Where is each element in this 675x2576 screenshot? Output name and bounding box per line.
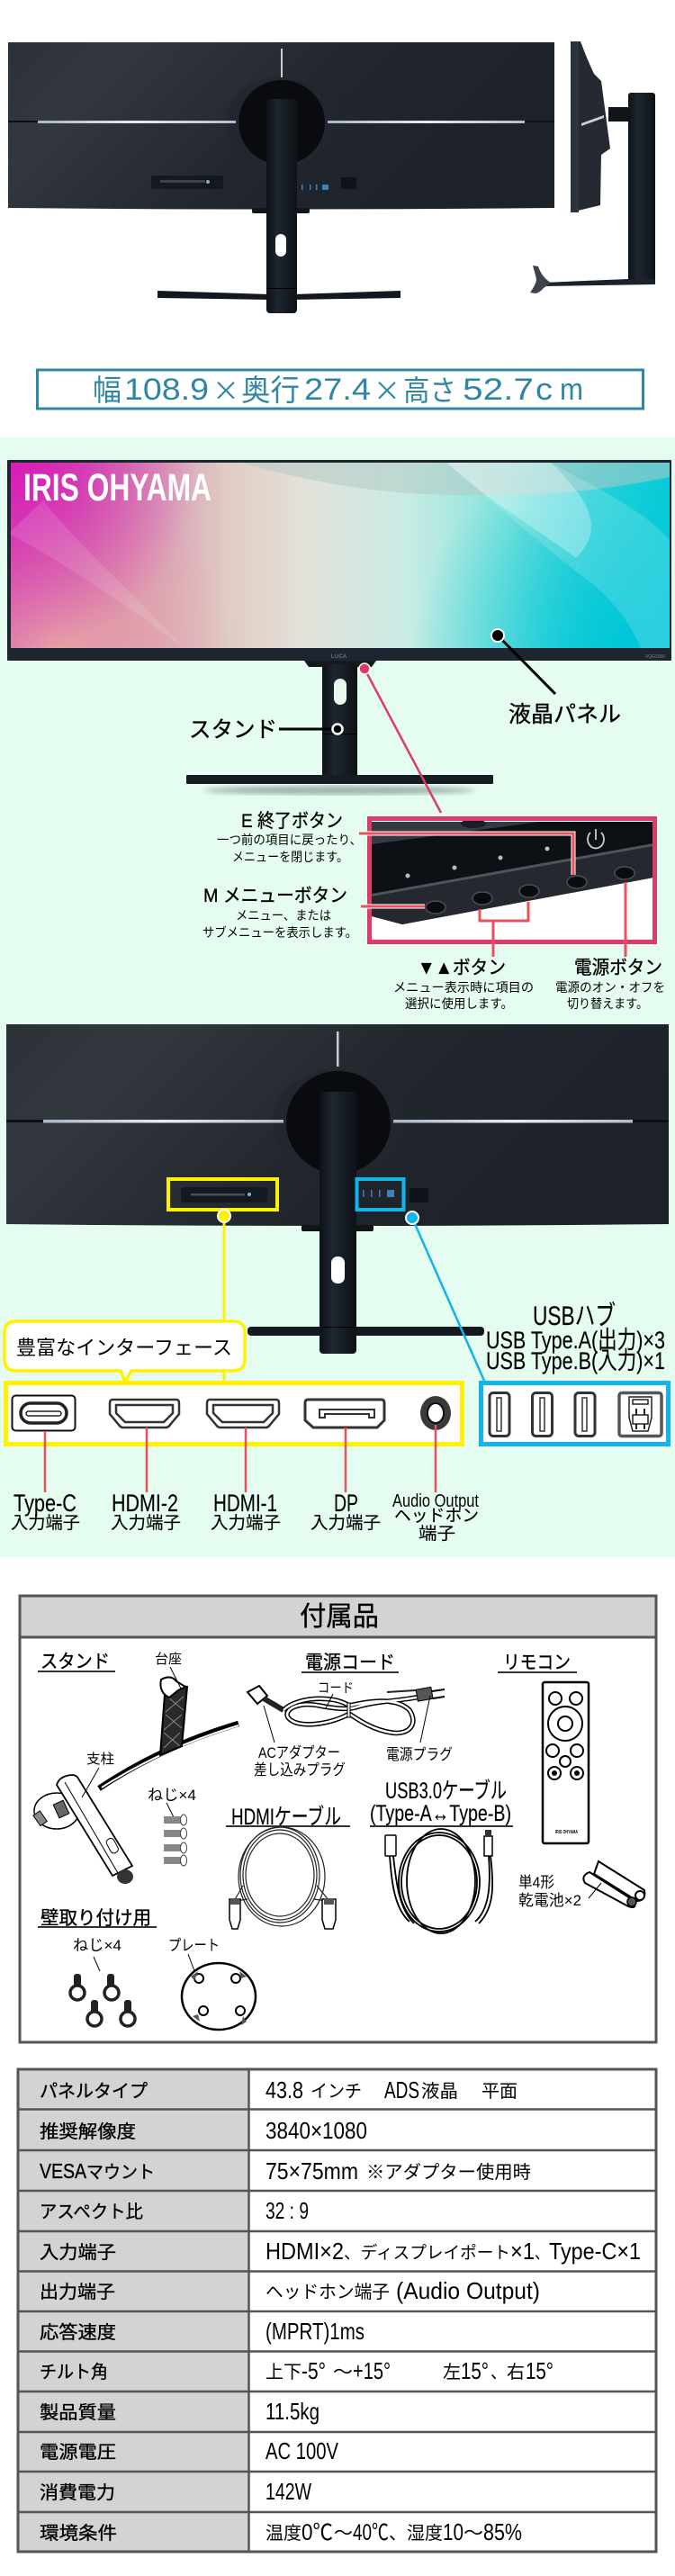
row: environment: ～: [464, 2524, 483, 2544]
row: response time: 応答速度: [40, 2322, 116, 2343]
row: environment: 40℃: [353, 2520, 389, 2545]
label: audio output: Audio Output: [392, 1491, 479, 1511]
row: tilt: 15°: [461, 2357, 489, 2384]
row: response time: (MPRT)1ms: [266, 2318, 364, 2345]
accessory: USB cable: (Type-A↔Type-B): [370, 1801, 511, 1826]
row: power consumption: 消費電力: [40, 2482, 115, 2503]
connector lines: buttons: [359, 833, 626, 957]
monitor stand rear: [158, 99, 400, 313]
accessory: power cord: コード: [318, 1680, 354, 1696]
label: up down buttons: 選択に使用します。: [405, 996, 513, 1011]
accessory: power cord: 電源コード: [305, 1653, 395, 1673]
connector lines: ports: [45, 1425, 436, 1492]
panel: mint parts background: [0, 437, 675, 1557]
accessory: power cord: ACアダプター: [258, 1744, 340, 1761]
accessory: HDMI cable: HDMIケーブル: [231, 1805, 341, 1830]
row: VESA: ※アダプター使用時: [366, 2162, 531, 2183]
row: environment: 85%: [483, 2518, 522, 2545]
row: tilt: -5°: [302, 2357, 326, 2384]
dimensions box: c: [536, 373, 553, 407]
label: HDMI-1: 入力端子: [211, 1513, 281, 1533]
port: DisplayPort: [305, 1400, 384, 1428]
leader: blue: [406, 1211, 484, 1381]
row: environment: 温度: [266, 2523, 302, 2544]
label: power button: 電源ボタン: [574, 958, 662, 978]
label: audio output: ヘッドホン: [394, 1507, 479, 1526]
label: audio output: 端子: [418, 1524, 455, 1544]
accessory: power cord: 電源プラグ: [386, 1746, 453, 1763]
row: panel type: 平面: [482, 2082, 518, 2102]
row: voltage: 電源電圧: [40, 2442, 116, 2463]
row: weight: 11.5kg: [266, 2398, 320, 2425]
row: inputs: ×1: [510, 2238, 535, 2265]
port: Type-C: [13, 1395, 76, 1431]
row: environment: [40, 2518, 522, 2545]
accessory: wall mount: プレート: [168, 1937, 220, 1954]
accessory: stand parts: 台座: [155, 1652, 182, 1667]
monitor side view: [530, 41, 655, 293]
accessory: stand parts: [33, 1652, 238, 1884]
row: environment: 、湿度: [389, 2523, 443, 2544]
accessory: stand parts: スタンド: [40, 1652, 110, 1672]
port: USB-A 2: [533, 1393, 553, 1437]
stand in rear photo: [248, 1092, 484, 1354]
row: environment: 環境条件: [40, 2523, 117, 2544]
row: tilt: 15°: [526, 2357, 554, 2384]
label: M menu button: メニュー、または: [236, 908, 331, 923]
leader: yellow: [218, 1210, 230, 1386]
row: resolution: 3840×1080: [266, 2117, 367, 2144]
row: panel type: 43.8: [266, 2076, 303, 2103]
dimensions box: 27.4: [304, 373, 371, 407]
port: USB-A 1: [490, 1393, 509, 1437]
port: USB-A 3: [575, 1393, 595, 1437]
label: USB hub: USBハブ: [533, 1302, 616, 1331]
label: HDMI-1: [211, 1490, 281, 1533]
accessories header: [20, 1596, 656, 1637]
accessory: batteries: [518, 1861, 644, 1909]
row: power consumption: 142W: [266, 2478, 311, 2505]
callout: LCD panel: 液晶パネル: [508, 702, 621, 727]
row: tilt: +15°: [353, 2357, 391, 2384]
row: panel type: パネルタイプ: [40, 2081, 148, 2102]
row: VESA: [40, 2157, 531, 2184]
row: inputs: 入力端子: [40, 2242, 116, 2263]
monitor front view: XQG1000: [645, 654, 665, 660]
dimensions box: m: [560, 373, 583, 407]
label: M menu button: [202, 886, 357, 940]
accessory: batteries: 乾電池×2: [518, 1892, 581, 1909]
label: HDMI-2: 入力端子: [111, 1513, 181, 1533]
accessory: batteries: 単4形: [518, 1874, 554, 1891]
accessory: wall mount: 壁取り付け用: [40, 1908, 151, 1929]
accessory: USB cable: [370, 1779, 513, 1933]
accessory: power cord: 差し込みプラグ: [254, 1761, 346, 1779]
row: environment: 10: [443, 2518, 464, 2545]
row: panel type: インチ: [310, 2082, 362, 2102]
section: rear and side product views: [8, 41, 655, 409]
row: panel type: 液晶: [421, 2081, 458, 2102]
label: up down buttons: [393, 958, 534, 1011]
accessory: remote control: IRIS OHYAMA: [555, 1830, 578, 1835]
callout: rich interface: 豊富なインターフェース: [16, 1337, 232, 1359]
dimensions box: 奥行: [241, 374, 300, 407]
row: panel type: [40, 2076, 518, 2103]
row: voltage: [40, 2437, 339, 2464]
callout: stand: [189, 717, 342, 743]
row: weight: [40, 2398, 320, 2425]
label: power button: 切り替えます。: [567, 996, 648, 1011]
accessory: power cord: [248, 1653, 453, 1779]
accessory: HDMI cable: [226, 1805, 350, 1929]
row: outputs: [40, 2277, 540, 2304]
label: power button: 電源のオン・オフを: [555, 980, 665, 995]
row: panel type: ADS: [384, 2076, 419, 2103]
monitor front view: LUCA: [331, 654, 346, 660]
row: aspect: 32 : 9: [266, 2197, 309, 2224]
accessory: remote control: リモコン: [503, 1653, 571, 1673]
row: inputs: Type-C×1: [549, 2238, 641, 2265]
dimensions box: ×: [374, 369, 400, 409]
row: tilt: 左: [443, 2362, 461, 2382]
row: environment: 0℃: [302, 2520, 333, 2545]
row: resolution: 推奨解像度: [40, 2121, 136, 2142]
label: M menu button: M メニューボタン: [203, 886, 347, 906]
row: inputs: 、ディスプレイポート: [344, 2243, 510, 2263]
row: environment: ～: [334, 2524, 353, 2544]
monitor rear view: [8, 42, 554, 213]
monitor front stand: [186, 661, 493, 795]
dimensions box: 52.7: [463, 373, 534, 407]
accessory: remote control: [498, 1653, 589, 1843]
row: inputs: 、: [535, 2244, 549, 2263]
label: E exit button: メニューを閉じます。: [232, 850, 348, 864]
label: audio output: [392, 1491, 479, 1544]
panel: USB ports: [481, 1383, 668, 1444]
accessory: USB cable: USB3.0ケーブル: [385, 1779, 507, 1804]
port: USB-B: [619, 1393, 662, 1437]
row: tilt: チルト角: [40, 2362, 108, 2382]
row: tilt: 上下: [266, 2362, 302, 2382]
row: outputs: ヘッドホン端子: [266, 2282, 390, 2302]
row: inputs: HDMI×2: [266, 2238, 344, 2265]
highlight: input port area: [168, 1179, 277, 1210]
dimensions box: ×: [212, 369, 239, 409]
row: voltage: AC 100V: [266, 2437, 339, 2464]
label: power button: [555, 958, 665, 1011]
row: VESA: VESA: [40, 2159, 87, 2183]
callout: rich interface: [4, 1321, 245, 1382]
button close-up photo: [369, 819, 655, 941]
row: aspect: アスペクト比: [40, 2202, 143, 2222]
row: power consumption: [40, 2478, 311, 2505]
label: DP: DP: [334, 1490, 358, 1517]
panel: accessories: [20, 1596, 656, 2042]
label: HDMI-2: HDMI-2: [112, 1490, 178, 1517]
callout: stand: スタンド: [189, 717, 277, 743]
label: E exit button: E 終了ボタン: [241, 811, 343, 832]
highlight: USB port area: [356, 1179, 403, 1210]
row: inputs: [40, 2238, 641, 2265]
pink leader line: [359, 663, 441, 813]
accessory: stand parts: 支柱: [86, 1752, 114, 1767]
table: specifications: [17, 2068, 657, 2553]
label: USB hub: [486, 1302, 665, 1374]
row: response time: [40, 2318, 364, 2345]
section: front parts diagram: [7, 460, 671, 1011]
port: audio output: [420, 1396, 451, 1430]
dimensions box: 幅: [93, 374, 122, 407]
row: tilt: ～: [333, 2363, 353, 2382]
accessory: stand parts: ねじ×4: [148, 1787, 196, 1804]
row: weight: 製品質量: [40, 2402, 116, 2423]
dimensions box: 高さ: [403, 374, 456, 407]
port: HDMI-2: [110, 1400, 179, 1428]
accessory: wall mount: [38, 1908, 256, 2030]
label: up down buttons: ▼▲ボタン: [418, 958, 506, 978]
accessory: wall mount: ねじ×4: [73, 1937, 122, 1954]
accessories header: 付属品: [300, 1602, 379, 1632]
row: VESA: 75×75mm: [266, 2157, 358, 2184]
row: tilt: 右: [507, 2362, 525, 2382]
label: Type-C: Type-C: [14, 1490, 76, 1517]
label: Type-C: 入力端子: [11, 1513, 80, 1533]
label: HDMI-1: HDMI-1: [213, 1490, 277, 1517]
callout: LCD panel: [491, 629, 621, 727]
panel: input ports: [5, 1383, 463, 1444]
label: M menu button: サブメニューを表示します。: [202, 925, 357, 940]
row: resolution: [40, 2117, 367, 2144]
row: tilt: [40, 2357, 554, 2384]
row: outputs: 出力端子: [40, 2282, 115, 2302]
label: HDMI-2: [111, 1490, 181, 1533]
label: E exit button: 一つ前の項目に戻ったり、: [217, 833, 362, 847]
monitor front view: [7, 460, 671, 661]
row: aspect: [40, 2197, 309, 2224]
label: Type-C: [11, 1490, 80, 1533]
monitor front view: IRIS OHYAMA: [23, 466, 212, 509]
label: up down buttons: メニュー表示時に項目の: [393, 980, 534, 995]
label: E exit button: [217, 811, 362, 864]
row: VESA: マウント: [86, 2163, 155, 2183]
label: DP: [310, 1490, 381, 1533]
monitor rear photo: [6, 1024, 669, 1231]
row: outputs: (Audio Output): [396, 2277, 540, 2304]
section: rear interface diagram: [4, 1024, 669, 1544]
dimensions box: 108.9: [124, 373, 209, 407]
port: HDMI-1: [207, 1400, 279, 1428]
row: tilt: 、: [490, 2363, 507, 2382]
dimensions box: [38, 369, 643, 409]
label: DP: 入力端子: [310, 1513, 381, 1533]
